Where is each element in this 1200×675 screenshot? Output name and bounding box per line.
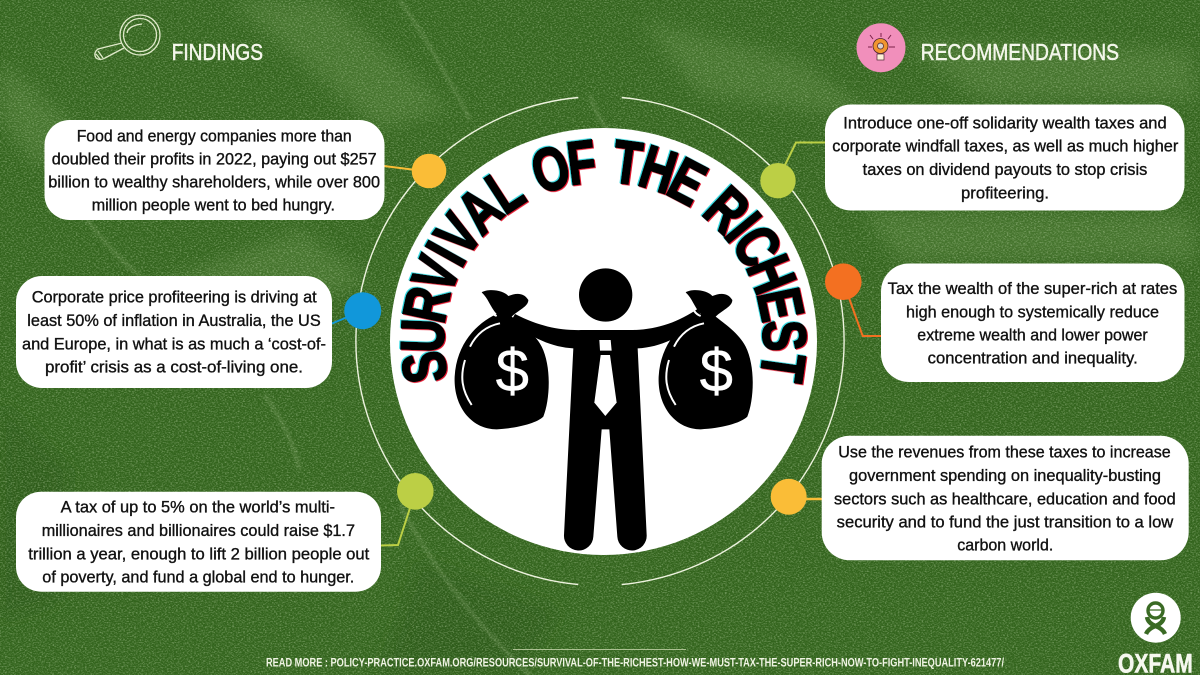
card text: concentration and inequality. <box>928 350 1138 368</box>
card <box>825 104 1184 210</box>
card text: trillion a year, enough to lift 2 billion people out <box>28 545 370 563</box>
recommendation 2 <box>825 263 1184 382</box>
connector <box>381 508 410 546</box>
card <box>822 436 1189 560</box>
card text: of poverty, and fund a global end to hunger. <box>42 569 354 587</box>
connector <box>384 166 412 170</box>
recommendation 3 <box>771 436 1189 560</box>
title: survival of the richest: F <box>563 128 600 198</box>
card text: high enough to systemically reduce <box>906 303 1159 321</box>
card <box>16 492 381 592</box>
left money bag: $ <box>496 337 529 404</box>
title: survival of the richest: C <box>719 214 794 279</box>
title: survival of the richest: L <box>475 155 536 227</box>
card text <box>834 444 1176 554</box>
findings heading <box>95 15 263 65</box>
recommendation 1 <box>760 104 1184 210</box>
card text: Food and energy companies more than <box>77 128 352 146</box>
title: survival of the richest: E <box>744 282 816 327</box>
connector <box>785 142 825 165</box>
card text: billion to wealthy shareholders, while over 800 <box>48 174 380 192</box>
title: survival of the richest: S <box>389 347 461 387</box>
title: survival of the richest: I <box>414 232 479 276</box>
left money bag <box>455 290 549 429</box>
card text <box>832 114 1179 202</box>
card text: Tax the wealth of the super-rich at rates <box>888 280 1177 298</box>
title: survival of the richest: T <box>747 348 817 386</box>
finding 2 <box>16 276 381 388</box>
title: survival of the richest: E <box>658 145 716 219</box>
connector <box>849 298 881 336</box>
title: survival of the richest: R <box>691 174 762 246</box>
dot <box>412 154 446 188</box>
card text: profit’ crisis as a cost-of-living one. <box>45 359 303 377</box>
card text: corporate windfall taxes, as well as much higher <box>832 138 1179 156</box>
oxfam logo <box>1118 593 1193 675</box>
right money bag <box>659 290 753 429</box>
card text: millionaires and billionaires could raise $1.7 <box>42 522 355 540</box>
title: survival of the richest: R <box>391 281 464 328</box>
dot <box>760 163 796 198</box>
card text: profiteering. <box>961 184 1049 202</box>
card text: doubled their profits in 2022, paying out $257 <box>52 150 377 168</box>
card text: and Europe, in what is as much a ‘cost-of- <box>22 335 326 353</box>
title: survival of the richest: O <box>524 132 578 207</box>
ring around central circle <box>356 98 844 584</box>
card text: Use the revenues from these taxes to increase <box>838 444 1171 462</box>
title: survival of the richest: A <box>445 175 515 247</box>
title: survival of the richest: U <box>389 318 458 354</box>
dot <box>771 479 807 515</box>
logo circle <box>1131 593 1181 643</box>
card <box>16 276 332 388</box>
card text: Introduce one-off solidarity wealth taxes and <box>843 114 1167 132</box>
card text <box>28 499 370 587</box>
card text: taxes on dividend payouts to stop crisis <box>863 161 1147 179</box>
title: survival of the richest: S <box>749 319 818 352</box>
man head <box>579 268 632 322</box>
card text: security and to fund the just transition to a low <box>837 514 1174 532</box>
connector <box>805 498 822 500</box>
recommendations label: RECOMMENDATIONS <box>921 39 1119 65</box>
read more link: READ MORE : POLICY-PRACTICE.OXFAM.ORG/RESOURCES/SURVIVAL-OF-THE-RICHEST-HOW-WE-MUST-TAX-THE-SUPER-RICH-NOW-TO-FIGHT-INEQUALITY-621477/ <box>266 656 1005 670</box>
card text: carbon world. <box>957 536 1053 554</box>
central white circle <box>390 128 817 555</box>
icon: light bulb on pink circle <box>856 23 906 72</box>
card text: least 50% of inflation in Australia, the US <box>27 312 321 330</box>
right money bag: $ <box>700 337 733 404</box>
card text: government spending on inequality-busting <box>849 467 1161 485</box>
title: survival of the richest: T <box>609 128 646 199</box>
title: survival of the richest <box>389 128 818 387</box>
finding 1 <box>44 120 446 220</box>
dot <box>397 473 434 510</box>
card text: A tax of up to 5% on the world’s multi- <box>61 499 335 517</box>
card text <box>22 289 326 377</box>
card text: million people went to bed hungry. <box>92 197 335 215</box>
recommendations heading <box>856 23 1119 72</box>
title: survival of the richest: H <box>733 246 808 303</box>
title: survival of the richest: V <box>399 247 473 301</box>
tie <box>594 340 617 416</box>
card text: extreme wealth and lower power <box>917 327 1148 345</box>
dot <box>344 292 381 329</box>
findings label: FINDINGS <box>172 39 263 65</box>
card text: Corporate price profiteering is driving at <box>32 289 317 307</box>
title: survival of the richest: I <box>712 201 773 254</box>
title: survival of the richest: V <box>422 202 495 267</box>
icon: businessman holding money bags <box>455 268 753 551</box>
title: survival of the richest: H <box>632 133 684 207</box>
dot <box>825 263 862 300</box>
connector <box>332 316 350 324</box>
card <box>881 264 1184 382</box>
man body <box>512 308 702 551</box>
card text <box>48 128 380 215</box>
card text: sectors such as healthcare, education and food <box>834 490 1176 508</box>
finding 3 <box>16 473 434 592</box>
card <box>44 120 384 220</box>
icon: magnifying glass <box>95 15 160 60</box>
card text <box>888 280 1177 368</box>
